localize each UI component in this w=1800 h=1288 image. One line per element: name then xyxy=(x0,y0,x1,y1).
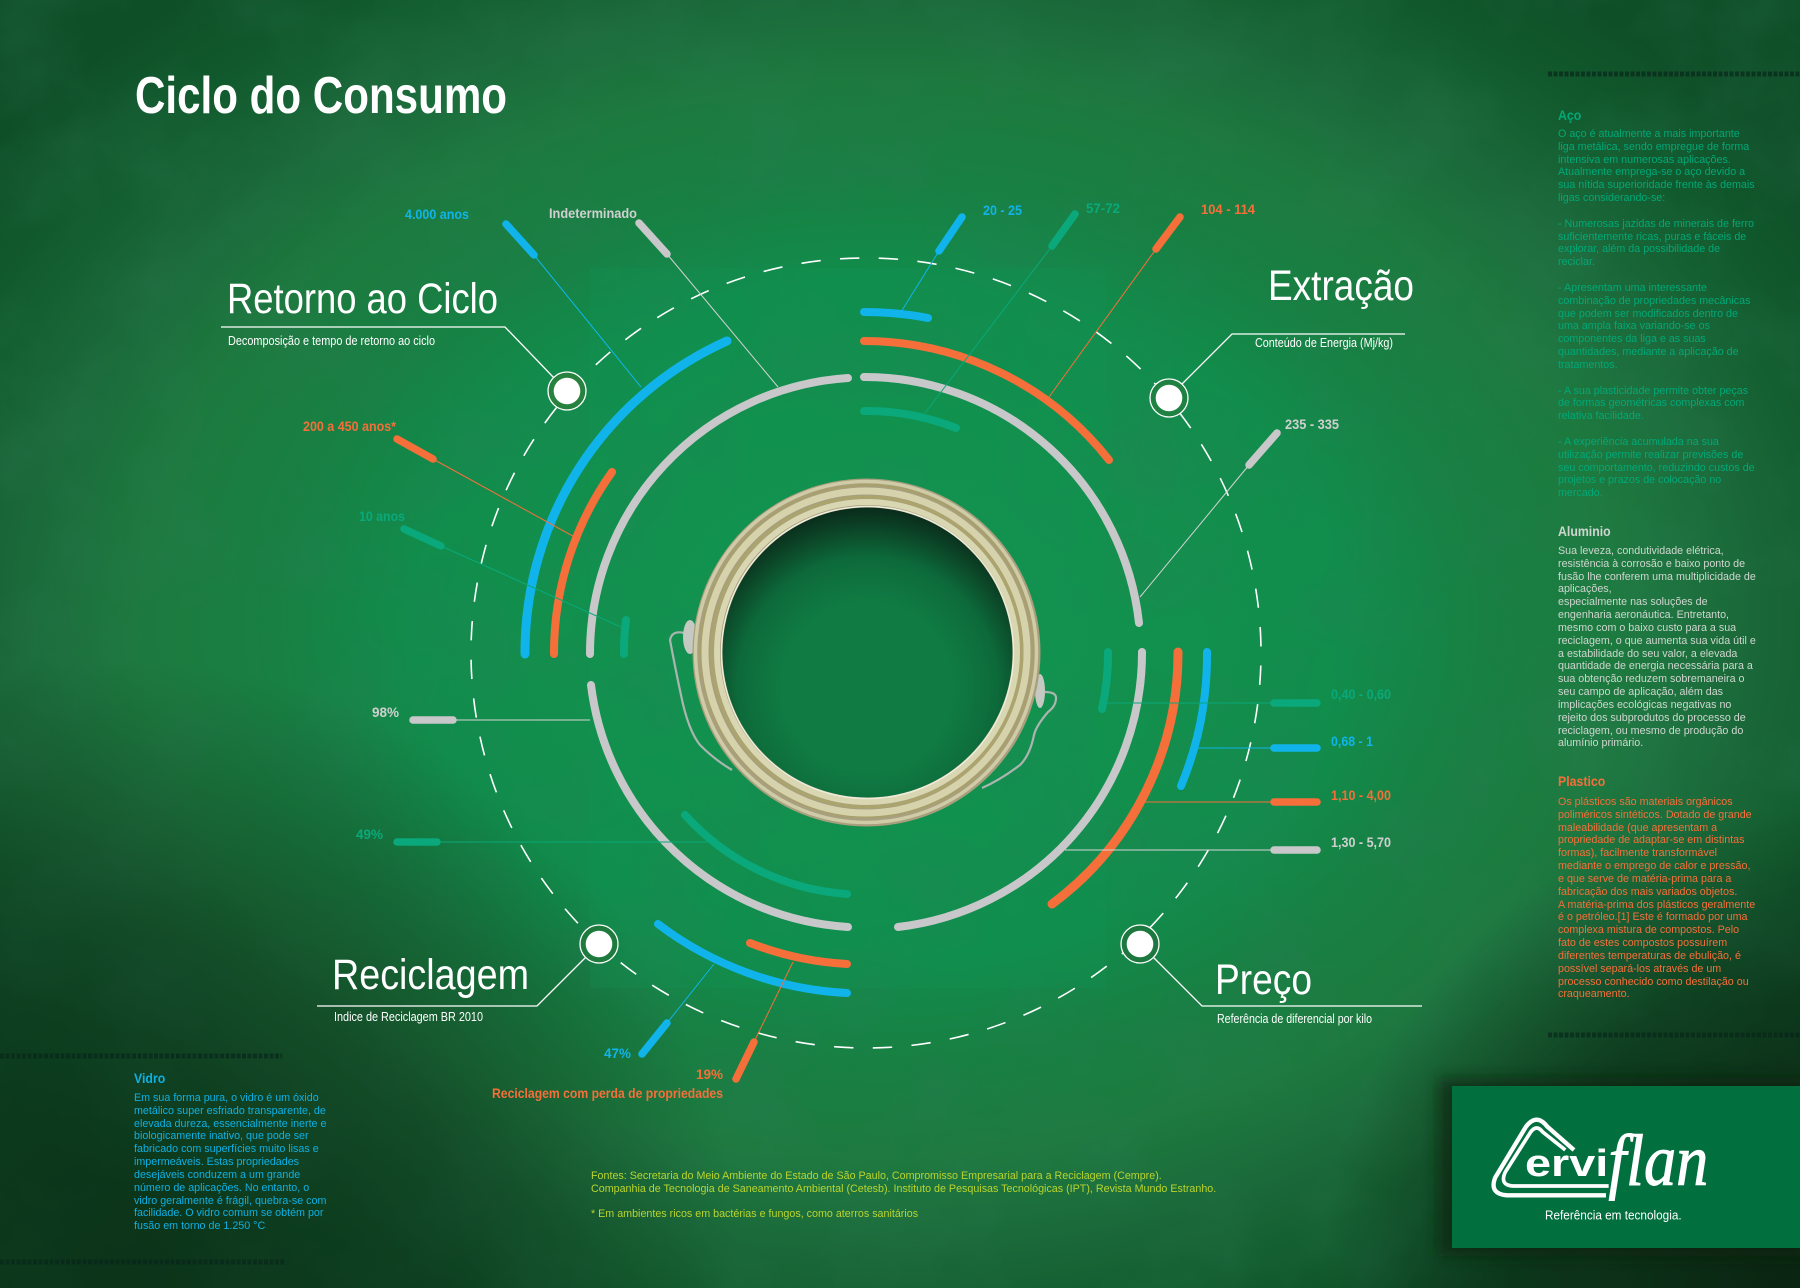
can rim xyxy=(692,478,1040,826)
text block: aluminio: engenharia aeronáutica. Entretanto, xyxy=(1558,609,1729,621)
section: preco xyxy=(1121,925,1422,1026)
text block: aco xyxy=(1558,107,1755,499)
text block: vidro: vidro geralmente é frágil, quebra-se com xyxy=(134,1195,326,1207)
text block: sources and footnote xyxy=(591,1170,1216,1220)
panel: preco arcs xyxy=(898,652,1207,927)
text block: aco: - Apresentam uma interessante xyxy=(1558,282,1707,294)
logo: ervi flan mark: Referência em tecnologia. xyxy=(1545,1208,1682,1223)
callout: 10 anos xyxy=(359,508,621,627)
text block: aco: combinação de propriedades mecânicas xyxy=(1558,295,1750,307)
text block: aluminio: resistência à corrosão e baixo ponto de xyxy=(1558,558,1745,570)
callout: 4.000 anos xyxy=(405,206,641,387)
text block: aluminio: a estabilidade do seu valor, a elevada xyxy=(1558,648,1737,660)
text block: plastico: poliméricos sintéticos. Dotado de grande xyxy=(1558,809,1752,821)
panel: retorno ao ciclo arcs xyxy=(525,341,848,654)
logo: ervi flan mark: ervi xyxy=(1525,1143,1608,1185)
callout: 20 - 25 xyxy=(901,202,1022,312)
text block: aluminio: seu campo de aplicação, além das xyxy=(1558,686,1723,698)
text block: plastico: maleabilidade (que apresentam a xyxy=(1558,822,1717,834)
text block: aluminio: sua obtenção reduzem sobremaneira o xyxy=(1558,673,1744,685)
text: Plastico xyxy=(1558,773,1605,789)
text block: aco: intensiva em numerosas aplicações. xyxy=(1558,154,1731,166)
text block: plastico: propriedade de adaptar-se em distintas xyxy=(1558,834,1744,846)
text block: plastico: A matéria-prima dos plásticos geralmente xyxy=(1558,899,1755,911)
callout: 47% xyxy=(604,964,714,1061)
callout: 57-72 xyxy=(925,200,1120,413)
text block: plastico: possível separá-los através de um xyxy=(1558,963,1721,975)
section: extracao: Conteúdo de Energia (Mj/kg) xyxy=(1255,335,1393,350)
text block: aluminio: rejeito dos subprodutos do processo de xyxy=(1558,712,1746,724)
text block: plastico: diferentes temperaturas de ebulição, é xyxy=(1558,950,1741,962)
text block: sources and footnote: Fontes: Secretaria do Meio Ambiente do Estado de São Paulo, Compromisso Empresarial para a Reciclagem (Cempre). xyxy=(591,1170,1162,1182)
section: extracao: Extração xyxy=(1268,262,1414,310)
text block: vidro xyxy=(134,1070,326,1232)
text block: aco: de formas geométricas complexas com xyxy=(1558,397,1744,409)
logo panel xyxy=(1438,1078,1800,1256)
text block: plastico: e que serve de matéria-prima para a xyxy=(1558,873,1731,885)
text block: aco: O aço é atualmente a mais importante xyxy=(1558,128,1740,140)
text block: aco: sua nítida superioridade frente às demais xyxy=(1558,179,1755,191)
callout: 200 a 450 anos xyxy=(303,418,580,540)
callout: 98%: 98% xyxy=(372,704,400,720)
panel: reciclagem arcs xyxy=(591,685,848,993)
section: retorno ao ciclo xyxy=(221,275,586,410)
text block: plastico: é o petróleo.[1] Este é formado por uma xyxy=(1558,911,1747,923)
section: preco: Referência de diferencial por kilo xyxy=(1217,1011,1372,1026)
dashed cycle circle xyxy=(471,258,1261,1048)
text block: aco: Atualmente emprega-se o aço devido a xyxy=(1558,166,1745,178)
text block: aluminio: Sua leveza, condutividade elétrica, xyxy=(1558,545,1724,557)
text block: aluminio: implicações ecológicas negativas no xyxy=(1558,699,1731,711)
text block: vidro: Em sua forma pura, o vidro é um óxido xyxy=(134,1092,319,1104)
callout: 235 - 335: 235 - 335 xyxy=(1285,416,1339,432)
callout: 19% reciclagem com perda de propriedades: Reciclagem com perda de propriedades xyxy=(492,1085,723,1101)
text block: plastico xyxy=(1558,773,1755,1000)
text block: aluminio: reciclagem, o que aumenta sua vida útil e xyxy=(1558,635,1756,647)
text block: plastico: mediante o emprego de calor e pressão, xyxy=(1558,860,1750,872)
text block: aco: ligas considerando-se: xyxy=(1558,192,1665,204)
text block: vidro: metálico super esfriado transparente, de xyxy=(134,1105,326,1117)
paint can xyxy=(670,478,1056,826)
callout: 1,30 - 5,70: 1,30 - 5,70 xyxy=(1331,834,1391,850)
can lugs xyxy=(683,620,1045,708)
text block: aluminio: quantidade de energia necessária para a xyxy=(1558,660,1753,672)
callout: indeterminado: Indeterminado xyxy=(549,205,637,221)
text block: aluminio xyxy=(1558,523,1756,749)
text block: aco: - Numerosas jazidas de minerais de ferro xyxy=(1558,218,1754,230)
text block: aco: mercado. xyxy=(1558,487,1603,499)
text block: aco: projetos e prazos de colocação no xyxy=(1558,474,1721,486)
text block: aco: quantidades, mediante a aplicação de xyxy=(1558,346,1739,358)
callout: 4.000 anos: 4.000 anos xyxy=(405,206,469,222)
text block: aco: componentes da liga e as suas xyxy=(1558,333,1706,345)
callout: 49%: 49% xyxy=(356,826,384,842)
text: Aluminio xyxy=(1558,523,1611,539)
callout: indeterminado xyxy=(549,205,778,387)
callout: 235 - 335 xyxy=(1140,416,1339,597)
callout: 104 - 114 xyxy=(1049,201,1255,397)
text block: vidro: elevada dureza, essencialmente inerte e xyxy=(134,1118,326,1130)
section: retorno ao ciclo: Retorno ao Ciclo xyxy=(227,275,498,323)
text block: aluminio: alumínio primário. xyxy=(1558,737,1643,749)
text block: plastico: formas), facilmente transformável xyxy=(1558,847,1717,859)
text block: aluminio: especialmente nas soluções de xyxy=(1558,596,1708,608)
callout: 0,40 - 0,60: 0,40 - 0,60 xyxy=(1331,686,1391,702)
section: extracao xyxy=(1150,262,1414,417)
text block: aco: utilização permite realizar previsões de xyxy=(1558,449,1743,461)
logo: ervi flan mark xyxy=(1494,1120,1708,1223)
text: Vidro xyxy=(134,1070,165,1086)
section: reciclagem: Indice de Reciclagem BR 2010 xyxy=(334,1009,483,1024)
text block: vidro: facilidade. O vidro comum se obtém por xyxy=(134,1207,323,1219)
text: Aço xyxy=(1558,107,1581,123)
callout: 1,10 - 4,00: 1,10 - 4,00 xyxy=(1331,787,1391,803)
text block: aco: reciclar. xyxy=(1558,256,1595,268)
can handle wires xyxy=(670,632,1056,788)
text block: plastico: Os plásticos são materiais orgânicos xyxy=(1558,796,1733,808)
text block: vidro: impermeáveis. Estas propriedades xyxy=(134,1156,299,1168)
text block: aco: liga metálica, sendo empregue de forma xyxy=(1558,141,1749,153)
title: Ciclo do Consumo xyxy=(135,67,507,125)
text block: sources and footnote: Companhia de Tecnologia de Saneamento Ambiental (Cetesb). Instituto de Pesquisas Tecnológicas (IPT), Revista Mundo Estranho. xyxy=(591,1183,1216,1195)
callout: 19% reciclagem com perda de propriedades xyxy=(492,962,793,1101)
text block: aluminio: mesmo com o baixo custo para a sua xyxy=(1558,622,1736,634)
text block: aco: explorar, além da possibilidade de xyxy=(1558,243,1720,255)
section: retorno ao ciclo: Decomposição e tempo de retorno ao ciclo xyxy=(228,333,435,348)
text block: plastico: craqueamento. xyxy=(1558,988,1630,1000)
callout: 104 - 114: 104 - 114 xyxy=(1201,201,1255,217)
text block: aco: - A sua plasticidade permite obter peças xyxy=(1558,385,1748,397)
text block: aco: suficientemente ricas, puras e fáceis de xyxy=(1558,231,1746,243)
logo: ervi flan mark: flan xyxy=(1608,1120,1708,1201)
text block: sources and footnote: * Em ambientes ricos em bactérias e fungos, como aterros sanitários xyxy=(591,1208,918,1220)
callout: 57-72: 57-72 xyxy=(1086,200,1120,216)
text block: aluminio: aplicações, xyxy=(1558,583,1612,595)
text block: aco: seu comportamento, reduzindo custos de xyxy=(1558,462,1755,474)
text block: plastico: fabricação dos mais variados objetos. xyxy=(1558,886,1737,898)
text block: aco: relativa facilidade. xyxy=(1558,410,1644,422)
text block: vidro: fabricado com superfícies muito lisas e xyxy=(134,1143,319,1155)
text block: vidro: número de aplicações. No entanto, o xyxy=(134,1182,309,1194)
section: reciclagem xyxy=(317,925,618,1024)
callout: 10 anos: 10 anos xyxy=(359,508,405,524)
text block: aluminio: reciclagem, ou mesmo de produção do xyxy=(1558,725,1743,737)
text block: plastico: fato de estes compostos possuírem xyxy=(1558,937,1727,949)
callout: 19% reciclagem com perda de propriedades: 19% xyxy=(696,1066,724,1082)
text block: vidro: biologicamente inativo, que pode ser xyxy=(134,1130,309,1142)
text block: plastico: complexa mistura de compostos. Pelo xyxy=(1558,924,1739,936)
callout: 47%: 47% xyxy=(604,1045,632,1061)
callout: 0,68 - 1: 0,68 - 1 xyxy=(1331,733,1373,749)
text block: aco: - A experiência acumulada na sua xyxy=(1558,436,1719,448)
text block: vidro: fusão em torno de 1.250 °C xyxy=(134,1220,265,1232)
panel: extracao arcs xyxy=(864,312,1139,623)
can interior xyxy=(722,508,1012,798)
callout: 20 - 25: 20 - 25 xyxy=(983,202,1022,218)
callout: 200 a 450 anos: 200 a 450 anos* xyxy=(303,418,396,434)
text block: aco: uma ampla faixa variando-se os xyxy=(1558,320,1710,332)
text block: aco: tratamentos. xyxy=(1558,359,1618,371)
text block: aco: que podem ser modificados dentro de xyxy=(1558,308,1738,320)
text block: plastico: processo conhecido como destilação ou xyxy=(1558,976,1749,988)
section: preco: Preço xyxy=(1215,956,1312,1004)
section: reciclagem: Reciclagem xyxy=(332,951,529,999)
text block: vidro: desejáveis conduzem a um grande xyxy=(134,1169,300,1181)
text block: aluminio: fusão lhe conferem uma multiplicidade de xyxy=(1558,571,1756,583)
